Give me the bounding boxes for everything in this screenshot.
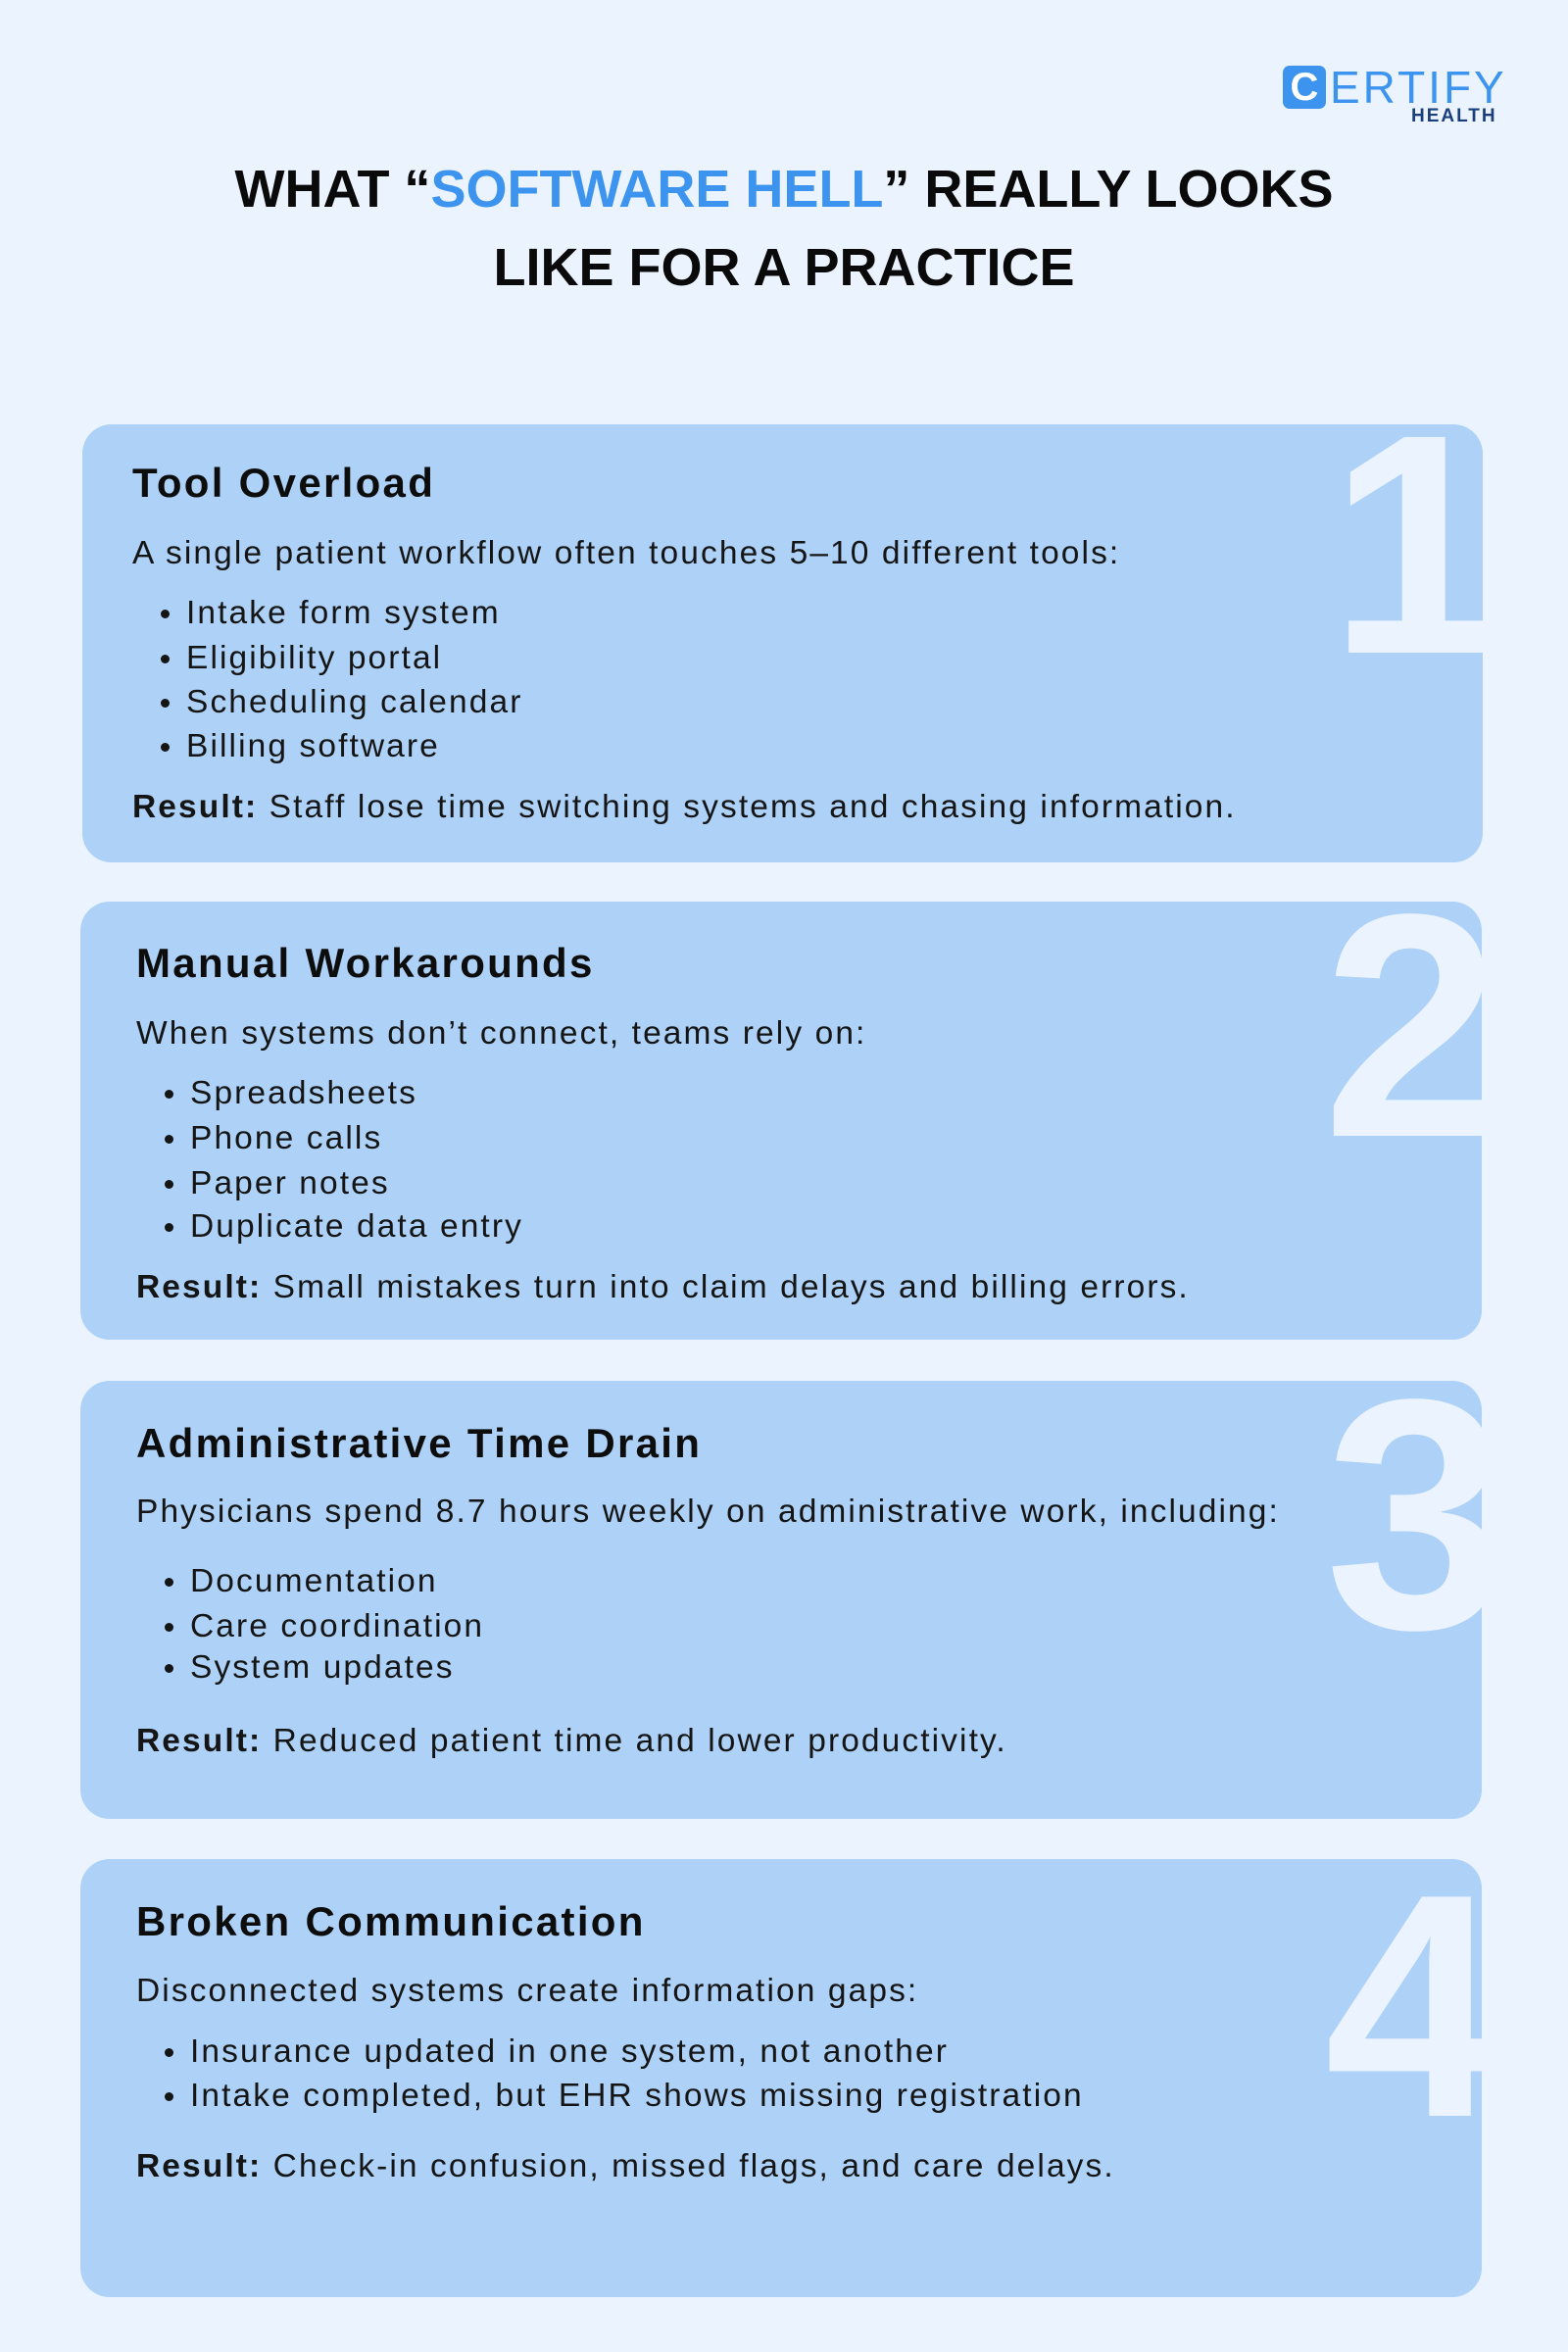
text: panel 4 xyxy=(136,1898,1115,2184)
text: panel 2 xyxy=(136,940,1190,1305)
panel: broken communication xyxy=(80,1859,1482,2297)
intro 1: A single patient workflow often touches 5–10 different tools: xyxy=(132,535,1120,571)
result 3: Result: Reduced patient time and lower productivity. xyxy=(136,1723,1007,1759)
logo C box xyxy=(1283,66,1326,109)
title: LIKE FOR A PRACTICE xyxy=(494,238,1074,297)
logo wordmark: ERTIFY xyxy=(1330,62,1507,113)
heading 4: Broken Communication xyxy=(136,1898,646,1944)
text: panel 2: Duplicate data entry xyxy=(190,1208,523,1245)
bullets 3 xyxy=(165,1563,484,1686)
title xyxy=(234,160,1334,297)
heading 2: Manual Workarounds xyxy=(136,940,595,986)
text: panel 3: Care coordination xyxy=(190,1608,484,1644)
text: panel 3 xyxy=(136,1420,1280,1759)
heading 3: Administrative Time Drain xyxy=(136,1420,702,1466)
panel: manual workarounds xyxy=(80,902,1482,1340)
text: panel 1 xyxy=(132,460,1237,825)
result 2: Result: Small mistakes turn into claim delays and billing errors. xyxy=(136,1269,1190,1305)
panel: tool overload xyxy=(82,424,1483,862)
text: panel 4: Intake completed, but EHR shows missing registration xyxy=(190,2078,1084,2114)
number 3: 3 xyxy=(1325,1331,1507,1697)
text: panel 2: Spreadsheets xyxy=(190,1075,417,1111)
logo subtext: HEALTH xyxy=(1411,106,1497,126)
text: panel 1: Intake form system xyxy=(186,595,501,631)
number 4: 4 xyxy=(1325,1828,1503,2183)
number 2: 2 xyxy=(1323,848,1499,1203)
intro 3: Physicians spend 8.7 hours weekly on administrative work, including: xyxy=(136,1494,1280,1530)
bullets 4 xyxy=(165,2034,1084,2114)
intro 2: When systems don’t connect, teams rely on: xyxy=(136,1015,866,1052)
text: panel 3: Documentation xyxy=(190,1563,438,1599)
logo C box: C xyxy=(1291,66,1318,109)
result 1: Result: Staff lose time switching systems and chasing information. xyxy=(132,789,1237,825)
text: panel 1: Eligibility portal xyxy=(186,640,442,676)
number 1: 1 xyxy=(1329,368,1503,719)
text: panel 1: Billing software xyxy=(186,728,440,764)
intro 4: Disconnected systems create information gaps: xyxy=(136,1973,918,2009)
bullets 1 xyxy=(161,595,522,764)
text: panel 1: Scheduling calendar xyxy=(186,684,522,720)
text: panel 3: System updates xyxy=(190,1649,455,1686)
text: panel 2: Phone calls xyxy=(190,1120,382,1156)
title: WHAT “SOFTWARE HELL” REALLY LOOKS xyxy=(234,160,1334,219)
text: panel 2: Paper notes xyxy=(190,1165,390,1201)
text: panel 4: Insurance updated in one system, not another xyxy=(190,2034,949,2070)
result 4: Result: Check-in confusion, missed flags, and care delays. xyxy=(136,2148,1115,2184)
bullets 2 xyxy=(165,1075,523,1245)
logo xyxy=(1283,62,1507,126)
panel: administrative time drain xyxy=(80,1381,1482,1819)
heading 1: Tool Overload xyxy=(132,460,435,506)
